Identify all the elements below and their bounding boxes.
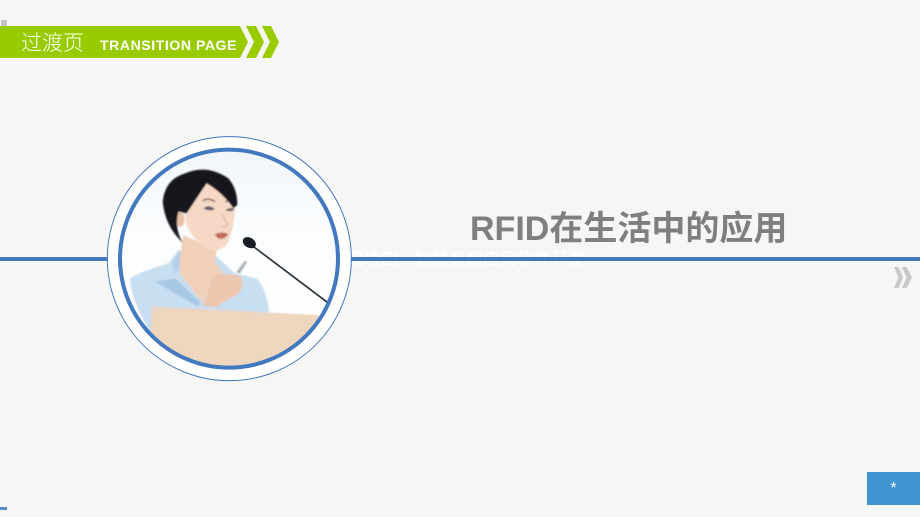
hand — [202, 274, 242, 307]
microphone — [250, 244, 327, 302]
header banner graphic — [0, 20, 279, 58]
neck and chest — [180, 235, 223, 302]
hair — [163, 170, 237, 243]
main title: RFID在生活中的应用 — [470, 210, 787, 248]
face — [185, 180, 235, 250]
icon: gray double chevrons — [894, 267, 912, 288]
header title english: TRANSITION PAGE — [100, 37, 237, 53]
small blue dash — [0, 507, 7, 510]
horizontal blue divider line — [0, 257, 920, 261]
ghost subtitle behind line: 模块四：智慧商超应用软件开发 — [347, 250, 585, 269]
podium — [150, 307, 318, 377]
circular portrait photo — [106, 136, 352, 382]
header title chinese: 过渡页 — [21, 27, 84, 57]
page number box — [867, 472, 920, 505]
page number box: * — [890, 480, 897, 497]
shirt — [130, 250, 269, 333]
